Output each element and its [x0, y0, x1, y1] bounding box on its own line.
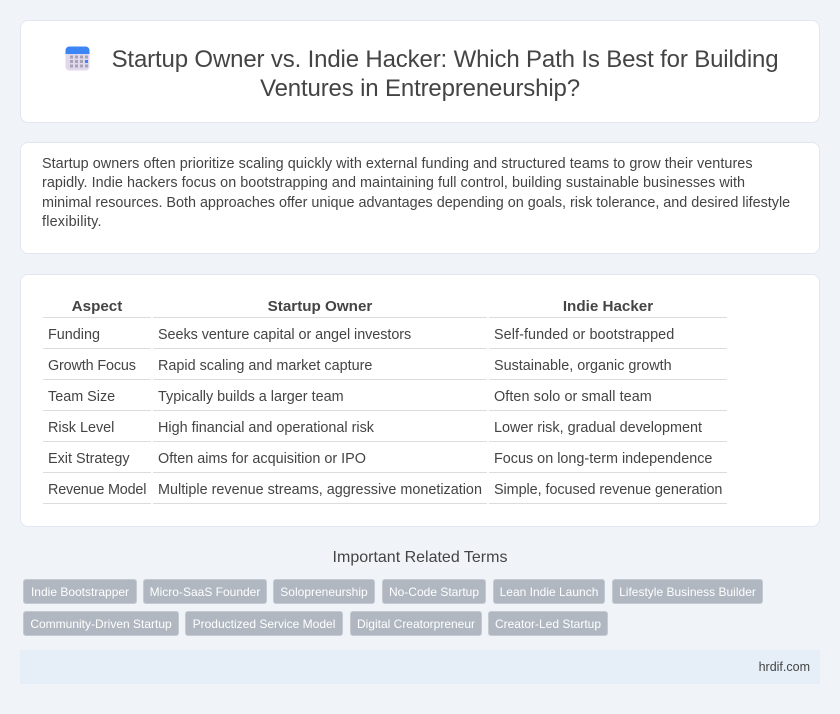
intro text: [42, 156, 790, 230]
comparison table: Risk Level: [48, 420, 114, 436]
related terms tags: Productized Service Model: [193, 617, 335, 631]
comparison table: Often solo or small team: [494, 389, 652, 405]
title: Startup Owner vs. Indie Hacker: Which Path Is Best for Building: [112, 46, 778, 73]
related terms tags: Creator-Led Startup: [495, 617, 601, 631]
panel: comparison table: [20, 274, 820, 527]
related terms heading: Important Related Terms: [333, 549, 507, 566]
column headings: Aspect: [72, 298, 122, 315]
comparison table: Typically builds a larger team: [158, 389, 344, 405]
panel: introduction: [20, 142, 820, 254]
comparison table: Rapid scaling and market capture: [158, 358, 372, 374]
intro text: minimal resources. Both approaches offer unique advantages depending on goals, risk tolerance, and desired lifestyle: [42, 195, 790, 211]
comparison table: Seeks venture capital or angel investors: [158, 327, 411, 343]
related terms tags: Digital Creatorpreneur: [357, 617, 475, 631]
comparison table: Revenue Model: [48, 482, 146, 498]
comparison table: High financial and operational risk: [158, 420, 374, 436]
comparison table: Funding: [48, 327, 100, 343]
related terms tags: Solopreneurship: [280, 585, 368, 599]
intro text: flexibility.: [42, 214, 102, 230]
panel: title card: [20, 20, 820, 123]
related terms tags: Micro-SaaS Founder: [150, 585, 260, 599]
footer bar: [20, 650, 820, 684]
footer source: hrdif.com: [759, 660, 810, 674]
comparison table: Often aims for acquisition or IPO: [158, 451, 366, 467]
related terms tags: Lean Indie Launch: [500, 585, 598, 599]
column headings: [72, 298, 653, 315]
column headings: Indie Hacker: [563, 298, 653, 315]
comparison table: Self-funded or bootstrapped: [494, 327, 674, 343]
related terms tags: Indie Bootstrapper: [31, 585, 129, 599]
title: Ventures in Entrepreneurship?: [260, 75, 580, 102]
comparison table: Growth Focus: [48, 358, 136, 374]
comparison table: Focus on long-term independence: [494, 451, 712, 467]
title: [112, 46, 778, 102]
comparison table: Sustainable, organic growth: [494, 358, 672, 374]
related terms tags: Lifestyle Business Builder: [619, 585, 756, 599]
comparison table: Exit Strategy: [48, 451, 130, 467]
related terms tags: Community-Driven Startup: [30, 617, 172, 631]
comparison table: Team Size: [48, 389, 115, 405]
related terms tags: [23, 579, 763, 636]
related terms tags: No-Code Startup: [389, 585, 479, 599]
comparison table: Simple, focused revenue generation: [494, 482, 722, 498]
intro text: rapidly. Indie hackers focus on bootstrapping and maintaining full control, building sustainable businesses with: [42, 175, 745, 191]
comparison table: [43, 298, 727, 504]
column headings: Startup Owner: [268, 298, 372, 315]
intro text: Startup owners often prioritize scaling quickly with external funding and structured teams to grow their ventures: [42, 156, 753, 172]
comparison table: Multiple revenue streams, aggressive monetization: [158, 482, 482, 498]
comparison table: Lower risk, gradual development: [494, 420, 702, 436]
icon: calendar: [66, 46, 90, 70]
